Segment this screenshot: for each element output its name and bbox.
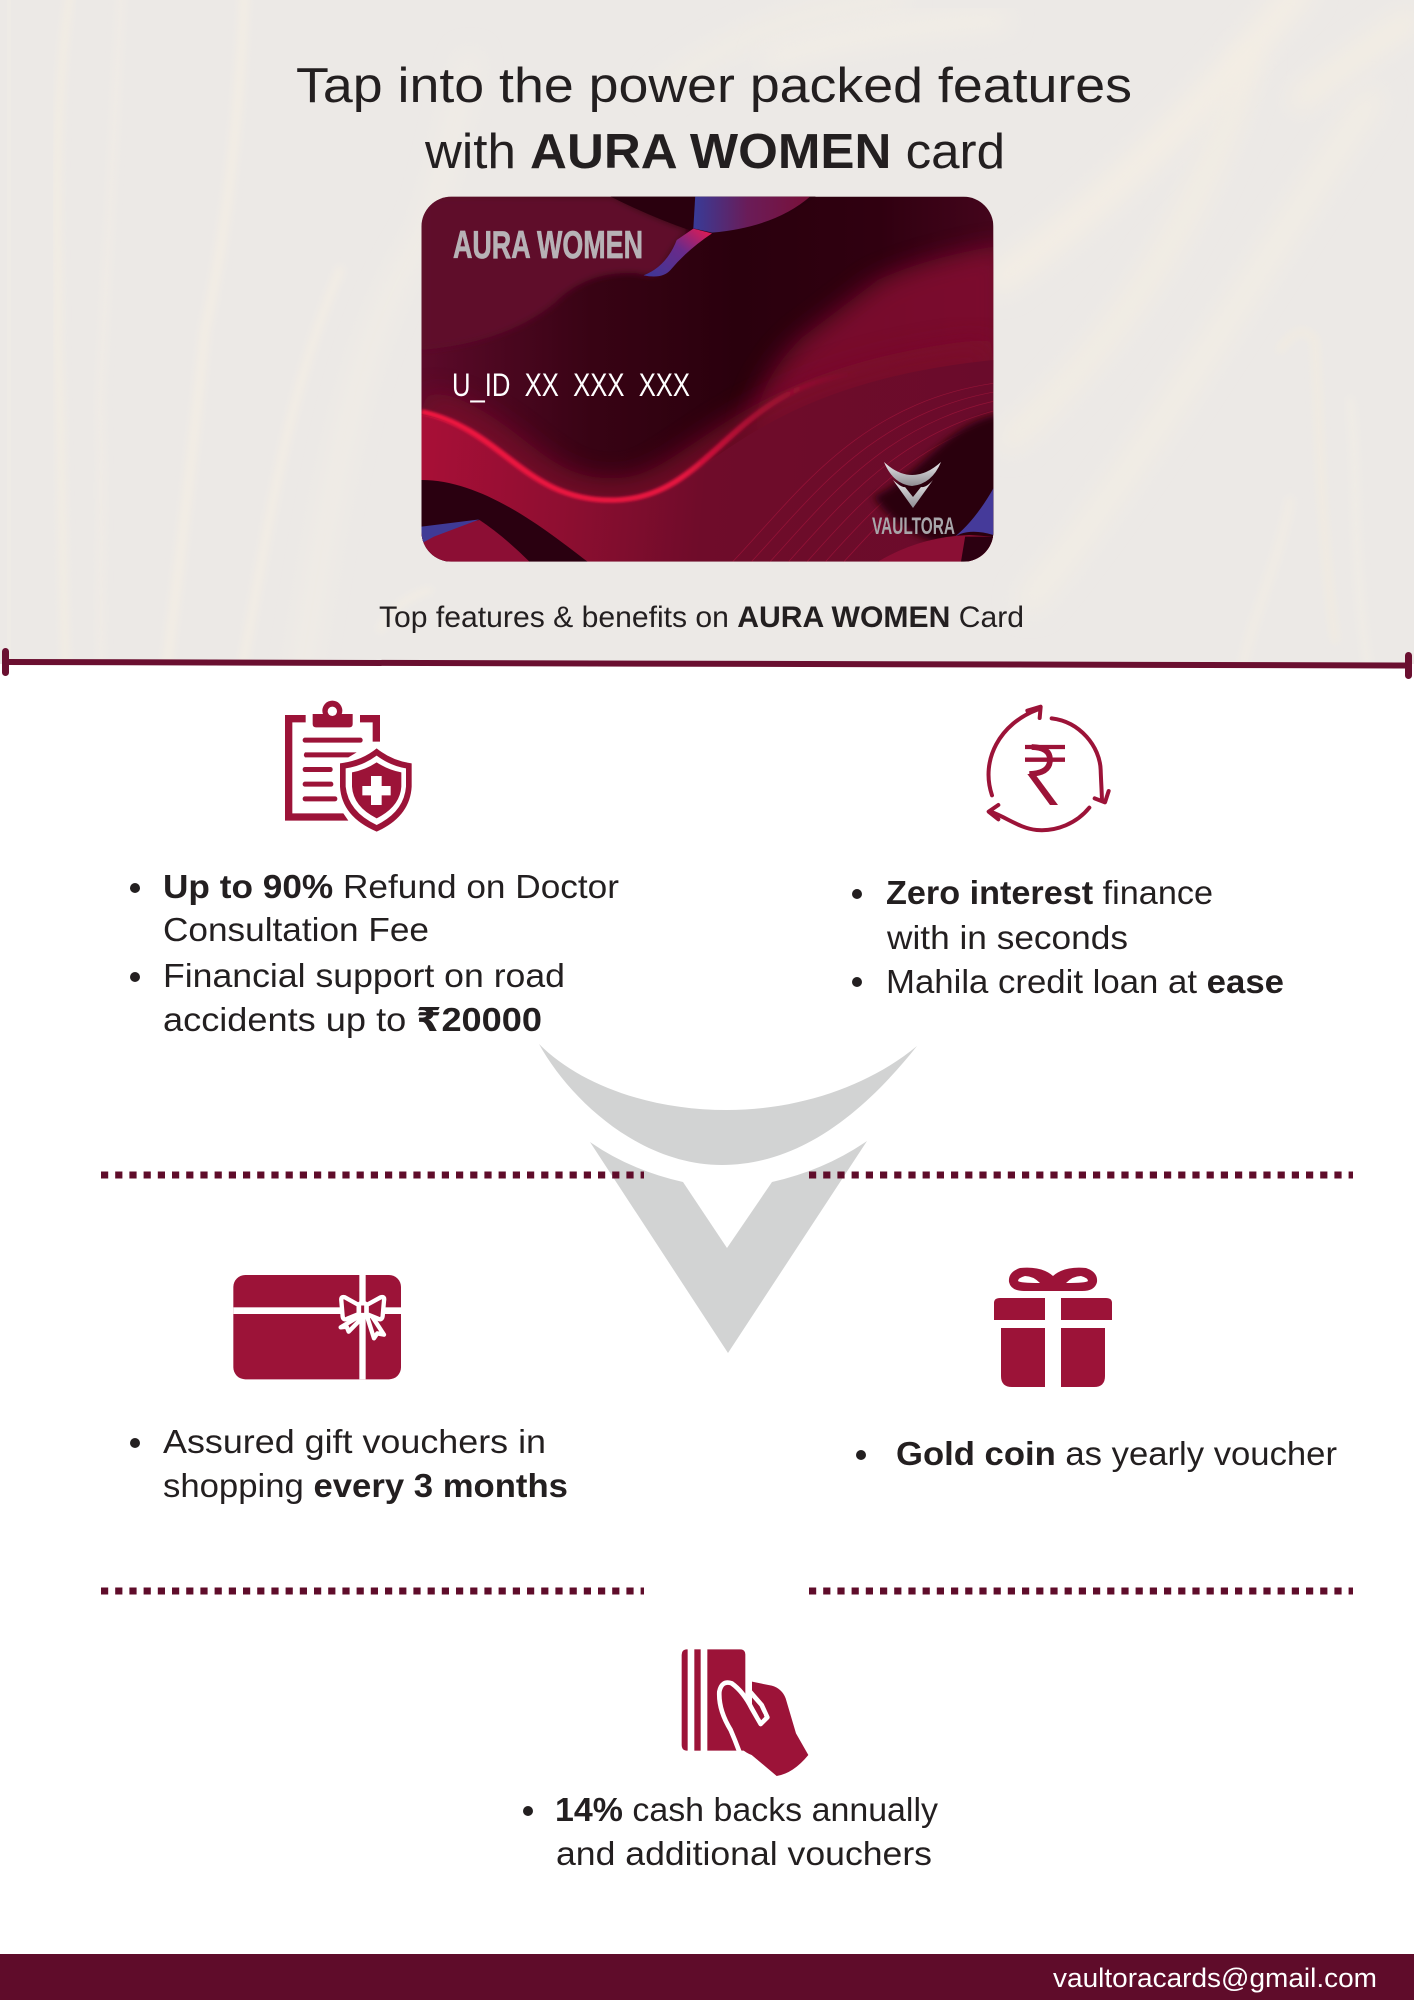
subtitle: Top features & benefits on AURA WOMEN Card [379,601,1024,634]
text: health benefits: accidents up to ₹20000 [163,1001,542,1038]
text: cash back benefit: and additional vouchers [556,1835,932,1872]
icon: gift card [233,1275,401,1379]
card logo: VAULTORA [872,513,955,540]
card: top left maroon and dark wisps [422,193,820,350]
card: red glow [422,360,993,500]
title: Tap into the power packed features [296,59,1132,113]
text: voucher benefit: shopping every 3 months [163,1467,568,1504]
text: gold coin benefit: Gold coin as yearly voucher [896,1435,1337,1472]
footer bar: vaultoracards@gmail.com [1053,1963,1377,1993]
text: finance benefits: Mahila credit loan at ease [886,963,1284,1000]
card: lower red wave [422,360,994,562]
header divider line [2,648,1412,679]
icon: hand holding card [682,1649,808,1776]
card id: U_ID XX XXX XXX [452,367,690,403]
icon: rupee cycle [989,707,1109,830]
text: voucher benefit: Assured gift vouchers in [163,1423,546,1460]
text: cash back benefit: 14% cash backs annually [555,1791,939,1828]
card: crimson upper right [754,243,1011,443]
text: health benefits: Consultation Fee [163,911,429,948]
marble header background [0,0,1414,680]
card logo [872,462,955,540]
icon: gift box [994,1268,1112,1387]
footer bar [0,1954,1414,2000]
text: health benefits [130,868,619,1038]
credit card image [422,196,994,562]
text: voucher benefit [130,1423,568,1504]
text: cash back benefit [523,1791,939,1872]
text: finance benefits: Zero interest finance [886,874,1213,911]
icon: clipboard with shield [285,701,412,832]
title: with AURA WOMEN card [424,125,1005,179]
card: bottom dark corners [422,413,1002,562]
title [296,59,1132,179]
watermark logo [539,1044,917,1353]
text: health benefits: Financial support on road [163,957,565,994]
text: finance benefits [852,874,1284,1000]
dotted dividers [101,1175,1353,1591]
card name: AURA WOMEN [453,224,643,267]
text: health benefits: Up to 90% Refund on Doctor [163,868,619,905]
text: finance benefits: with in seconds [886,919,1128,956]
